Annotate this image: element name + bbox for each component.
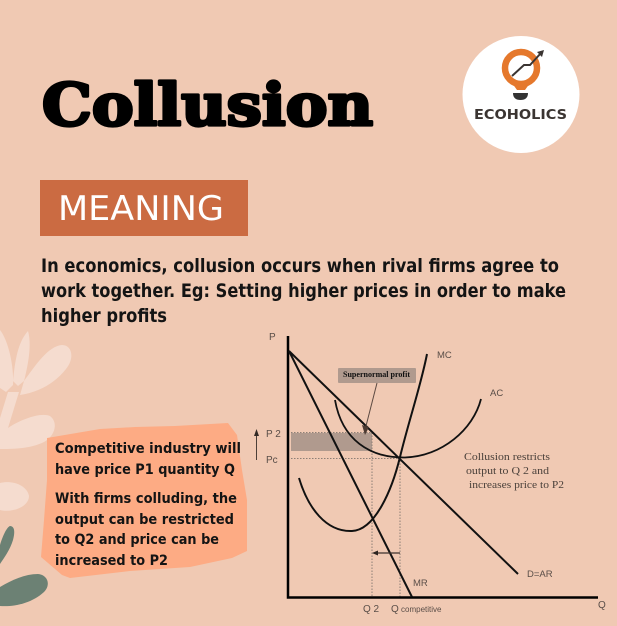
demand curve xyxy=(289,351,518,574)
chart annotation: increases price to P2 xyxy=(469,479,564,491)
callout: competitive vs colluding: to Q2 and price can be xyxy=(55,532,219,548)
callout: competitive vs colluding: Competitive industry will xyxy=(55,441,241,457)
logo: Ecoholics xyxy=(462,36,580,153)
supernormal profit shaded area xyxy=(291,433,372,451)
axis and curve labels: D=AR xyxy=(527,569,553,580)
chart: collusion cost and revenue diagram xyxy=(254,332,606,615)
heading: meaning: MEANING xyxy=(58,189,224,229)
definition text xyxy=(41,255,566,327)
supernormal profit label xyxy=(338,368,416,383)
pointer arrow to shaded area xyxy=(362,383,377,435)
decorative green plant xyxy=(0,526,48,606)
supernormal profit label: Supernormal profit xyxy=(343,369,410,379)
axis and curve labels: P xyxy=(269,332,276,343)
axis and curve labels xyxy=(266,332,606,615)
axis and curve labels: Pc xyxy=(266,455,278,466)
axis and curve labels: P 2 xyxy=(266,429,281,440)
marginal revenue curve xyxy=(289,351,412,597)
callout: competitive vs colluding: have price P1 quantity Q xyxy=(55,462,235,478)
chart annotation: Collusion restricts xyxy=(464,451,550,463)
axis and curve labels: AC xyxy=(490,388,503,399)
definition text: higher profits xyxy=(41,305,167,327)
chart annotation xyxy=(464,451,564,491)
axis and curve labels: MR xyxy=(413,578,428,589)
price increase arrow xyxy=(254,429,259,460)
quantity restriction arrow xyxy=(372,550,400,556)
callout: competitive vs colluding: With firms colluding, the xyxy=(55,491,237,507)
axis and curve labels: Q 2 xyxy=(363,604,380,615)
axis and curve labels: competitive xyxy=(401,605,442,614)
axis and curve labels: MC xyxy=(437,350,452,361)
heading: meaning xyxy=(40,180,248,236)
icon: light bulb with rising arrow xyxy=(505,50,544,100)
average cost curve xyxy=(335,399,481,458)
callout: competitive vs colluding xyxy=(41,423,247,578)
marginal cost curve xyxy=(299,354,427,531)
chart annotation: output to Q 2 and xyxy=(466,465,550,477)
callout: competitive vs colluding: output can be restricted xyxy=(55,512,234,528)
dotted guide lines xyxy=(291,432,400,597)
axes xyxy=(288,336,598,598)
decorative light plant xyxy=(0,330,71,511)
logo wordmark: ECOHOLICS xyxy=(474,107,567,123)
axis and curve labels: Q xyxy=(391,604,399,615)
callout: competitive vs colluding: increased to P2 xyxy=(55,553,168,569)
axis and curve labels: Q xyxy=(598,600,606,611)
title: Collusion xyxy=(42,71,373,139)
